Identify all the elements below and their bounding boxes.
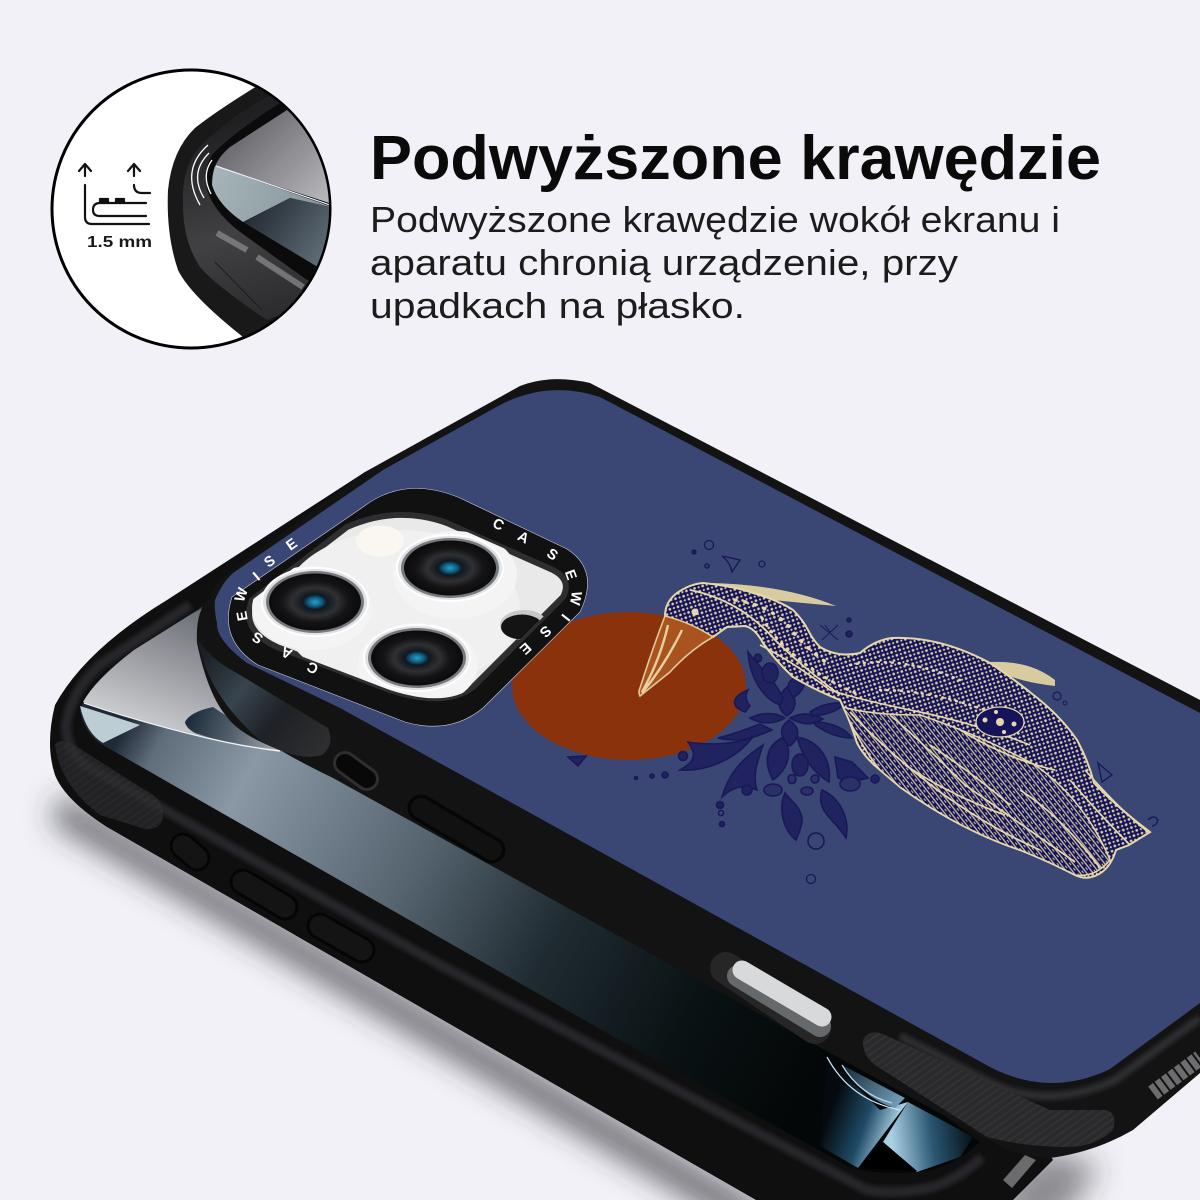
camera ring brand lettering: A: [515, 528, 532, 548]
description text: [370, 199, 1060, 326]
icon: 1.5 mm raised edge diagram: [79, 164, 150, 224]
camera ring brand lettering: S: [250, 627, 266, 646]
front phone: side pad near camera: [198, 640, 330, 757]
icon label: 1.5 mm: [87, 234, 152, 251]
front phone: carbon pad bottom: [863, 1032, 1114, 1147]
camera ring brand lettering: S: [543, 546, 561, 565]
back phone: bottom right port detail: [1003, 1155, 1036, 1188]
heron eye: [692, 608, 698, 616]
camera ring brand lettering: I: [250, 570, 264, 584]
inset circle: raised edge detail: [52, 70, 345, 348]
phone mockup: [50, 379, 1200, 1200]
front phone: speaker detail: [1153, 1058, 1200, 1093]
heron wing rosette: [976, 707, 1024, 737]
camera ring brand lettering: E: [283, 535, 301, 554]
lens: left: [262, 568, 368, 636]
flower centre petals: [718, 652, 852, 782]
description text: upadkach na płasko.: [370, 285, 745, 326]
camera ring brand lettering: E: [516, 639, 534, 657]
camera ring brand lettering: S: [261, 552, 279, 571]
heron crest: [712, 583, 1055, 686]
inset: impact arcs: [192, 145, 212, 205]
camera modules: [252, 526, 548, 707]
camera ring brand lettering: W: [232, 586, 252, 604]
camera ring brand lettering: E: [561, 568, 579, 583]
lidar: [500, 610, 548, 640]
camera ring brand lettering: C: [304, 657, 321, 676]
title: Podwyższone krawędzie: [370, 124, 1101, 193]
inset: phone corner close-up: [168, 87, 329, 337]
screen reflection: [80, 560, 340, 751]
flash: [356, 526, 404, 556]
front phone: charging port: [726, 968, 822, 1028]
camera ring brand lettering: I: [557, 610, 573, 624]
front phone: rim highlight: [900, 1018, 1200, 1096]
lens: top right: [397, 535, 503, 601]
camera ring brand lettering: C: [490, 515, 507, 535]
back phone: case body: [50, 470, 1053, 1200]
back phone: screen: [80, 495, 980, 1173]
camera window: [249, 515, 566, 698]
description text: aparatu chronią urządzenie, przy: [370, 242, 958, 283]
artwork: orange sun: [512, 612, 746, 760]
description text: Podwyższone krawędzie wokół ekranu i: [370, 199, 1060, 240]
camera ring brand lettering: S: [536, 622, 554, 640]
heron feathers: [690, 590, 1148, 868]
artwork: heron: [639, 583, 1150, 878]
camera ring brand lettering: E: [234, 610, 252, 622]
screen glow bottom right: [820, 1057, 973, 1172]
lens: bottom: [364, 625, 470, 691]
heron beak: [639, 616, 713, 696]
front phone: side buttons: [345, 763, 492, 850]
drop shadow: [52, 795, 1100, 1200]
back phone: carbon corner pad: [55, 741, 163, 829]
flower wings and crescents: [680, 660, 868, 840]
camera ring brand lettering: A: [278, 642, 295, 661]
front phone: blue back panel: [215, 390, 1200, 1083]
heron wing: [843, 707, 1110, 875]
camera ring brand lettering: W: [566, 590, 584, 606]
heron neck beads: [735, 600, 1010, 720]
front phone: case: [197, 379, 1200, 1158]
flower seeds and scattered marks: [568, 540, 1158, 884]
back phone: side buttons: [183, 846, 362, 950]
camera ring brand lettering: [232, 515, 584, 676]
camera ring: [228, 488, 588, 726]
heron body: [665, 583, 1150, 878]
artwork: dark flower: [568, 540, 1158, 884]
